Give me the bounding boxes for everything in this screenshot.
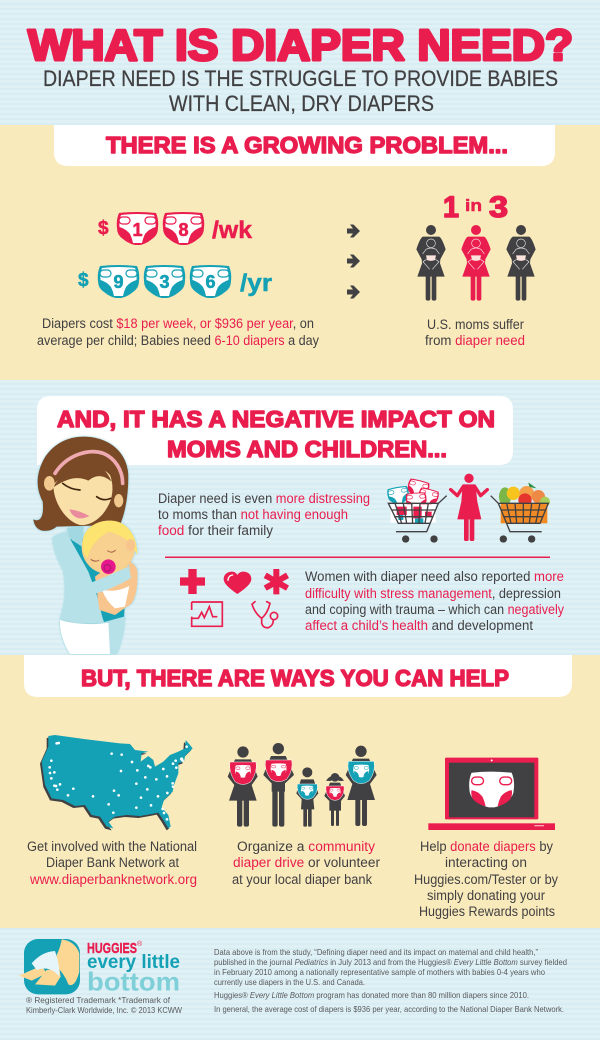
weekly cost diapers: $ bbox=[98, 218, 109, 239]
heading: growing problem bbox=[54, 125, 555, 166]
text: sources fine print: published in the journal Pediatrics in July 2013 and from the Huggies® Every Little Bottom survey fielded bbox=[214, 957, 567, 967]
text: diaper drive bbox=[232, 839, 381, 887]
text: stress management bbox=[305, 569, 564, 633]
text: diaper cost: average per child; Babies need 6-10 diapers a day bbox=[37, 333, 319, 348]
title: WHAT IS DIAPER NEED? bbox=[28, 21, 573, 70]
text: diaper bank network: Diaper Bank Network at bbox=[46, 855, 179, 870]
text: sources fine print: Huggies® Every Little Bottom program has donated more than 80 million diapers since 2010. bbox=[214, 990, 529, 1000]
map: US diaper banks bbox=[40, 735, 193, 830]
stat: 1 in 3: 3 bbox=[489, 191, 508, 224]
weekly cost diapers: 1 bbox=[132, 220, 143, 240]
divider line bbox=[165, 556, 550, 558]
text: sources fine print: currently use diapers in the U.S. and Canada. bbox=[214, 977, 365, 987]
text: sources fine print: in February 2010 among a nationally representative sample of mothers with babies 0-4 years who bbox=[214, 967, 545, 977]
heading: ways to help bbox=[24, 655, 572, 697]
text: donate diapers: interacting on bbox=[445, 855, 527, 870]
yearly cost diapers: 3 bbox=[159, 272, 170, 292]
text: stress management: affect a child’s health and development bbox=[305, 618, 533, 633]
text: moms suffer bbox=[425, 317, 525, 348]
panel: growing problem background bbox=[0, 125, 600, 380]
stat: 1 in 3: 1 bbox=[443, 191, 459, 224]
text: trademark: Kimberly-Clark Worldwide, Inc. © 2013 KCWW bbox=[26, 1005, 183, 1015]
logo: Huggies every little bottom bbox=[19, 939, 180, 996]
text: donate diapers: Help donate diapers by bbox=[420, 839, 553, 854]
text: stress management: difficulty with stress management, depression bbox=[305, 586, 561, 601]
icon: laptop with diaper bbox=[428, 758, 555, 830]
text: sources fine print bbox=[214, 947, 567, 1014]
text: stress management: Women with diaper need also reported more bbox=[305, 569, 564, 584]
yearly cost diapers: $ bbox=[78, 270, 89, 291]
arrows bbox=[347, 224, 360, 298]
text: sources fine print: In general, the average cost of diapers is $936 per year, according to the National Diaper Bank Network. bbox=[214, 1004, 564, 1014]
icon: diaper cart, mom, food cart bbox=[386, 474, 550, 543]
icon: baby bbox=[19, 939, 80, 994]
yearly cost diapers: /yr bbox=[240, 270, 272, 297]
icon: three moms bbox=[416, 225, 536, 301]
text: donate diapers bbox=[414, 839, 558, 919]
icon: family holding diapers bbox=[228, 743, 377, 827]
stat: 1 in 3 bbox=[443, 191, 508, 224]
text: donate diapers: Huggies.com/Tester or by bbox=[414, 872, 558, 887]
text: diaper drive: at your local diaper bank bbox=[232, 872, 372, 887]
text: stress management: and coping with trauma – which can negatively bbox=[305, 602, 564, 617]
logo: Huggies every little bottom: every little bbox=[87, 952, 180, 973]
heading: negative impact bbox=[37, 396, 513, 465]
text: diaper cost: Diapers cost $18 per week, or $936 per year, on bbox=[42, 316, 314, 331]
text: more distressing bbox=[158, 491, 370, 538]
text: diaper drive: Organize a community bbox=[237, 839, 375, 854]
panel: ways to help background bbox=[0, 655, 600, 928]
logo: Huggies every little bottom: bottom bbox=[87, 966, 180, 996]
weekly cost diapers: 8 bbox=[178, 220, 189, 240]
weekly cost diapers: /wk bbox=[212, 217, 253, 244]
weekly cost diapers bbox=[98, 212, 253, 245]
yearly cost diapers: 9 bbox=[113, 272, 124, 292]
text: sources fine print: Data above is from the study, “Defining diaper need and its impact on maternal and child health,” bbox=[214, 947, 538, 957]
heading: negative impact: MOMS AND CHILDREN... bbox=[167, 436, 447, 462]
text: diaper cost bbox=[37, 316, 319, 348]
stat: 1 in 3: in bbox=[465, 196, 482, 215]
text: trademark bbox=[26, 995, 183, 1015]
text: diaper bank network: www.diaperbanknetwork.org bbox=[29, 872, 197, 887]
text: moms suffer: U.S. moms suffer bbox=[427, 317, 524, 332]
text: donate diapers: Huggies Rewards points bbox=[419, 904, 555, 919]
logo: Huggies every little bottom: HUGGIES bbox=[87, 940, 137, 957]
subtitle bbox=[43, 66, 558, 116]
heading: ways to help: BUT, THERE ARE WAYS YOU CAN HELP bbox=[81, 665, 509, 691]
text: diaper drive: diaper drive or volunteer bbox=[233, 855, 381, 870]
yearly cost diapers: 6 bbox=[205, 272, 216, 292]
text: moms suffer: from diaper need bbox=[425, 333, 525, 348]
text: more distressing: to moms than not having enough bbox=[158, 507, 348, 522]
text: diaper bank network: Get involved with the National bbox=[27, 839, 197, 854]
text: more distressing: Diaper need is even more distressing bbox=[158, 491, 370, 506]
text: trademark: ® Registered Trademark *Trademark of bbox=[26, 995, 171, 1005]
text: diaper bank network bbox=[27, 839, 197, 887]
subtitle: WITH CLEAN, DRY DIAPERS bbox=[169, 91, 434, 116]
text: donate diapers: simply donating your bbox=[427, 888, 545, 903]
heading: growing problem: THERE IS A GROWING PROBLEM... bbox=[106, 132, 508, 158]
logo: Huggies every little bottom: ® bbox=[137, 940, 143, 948]
heading: negative impact: AND, IT HAS A NEGATIVE IMPACT ON bbox=[57, 406, 495, 432]
illustration: mother holding baby bbox=[33, 437, 137, 654]
icons: health bbox=[180, 569, 289, 628]
text: more distressing: food for their family bbox=[158, 523, 273, 538]
yearly cost diapers bbox=[78, 265, 272, 298]
